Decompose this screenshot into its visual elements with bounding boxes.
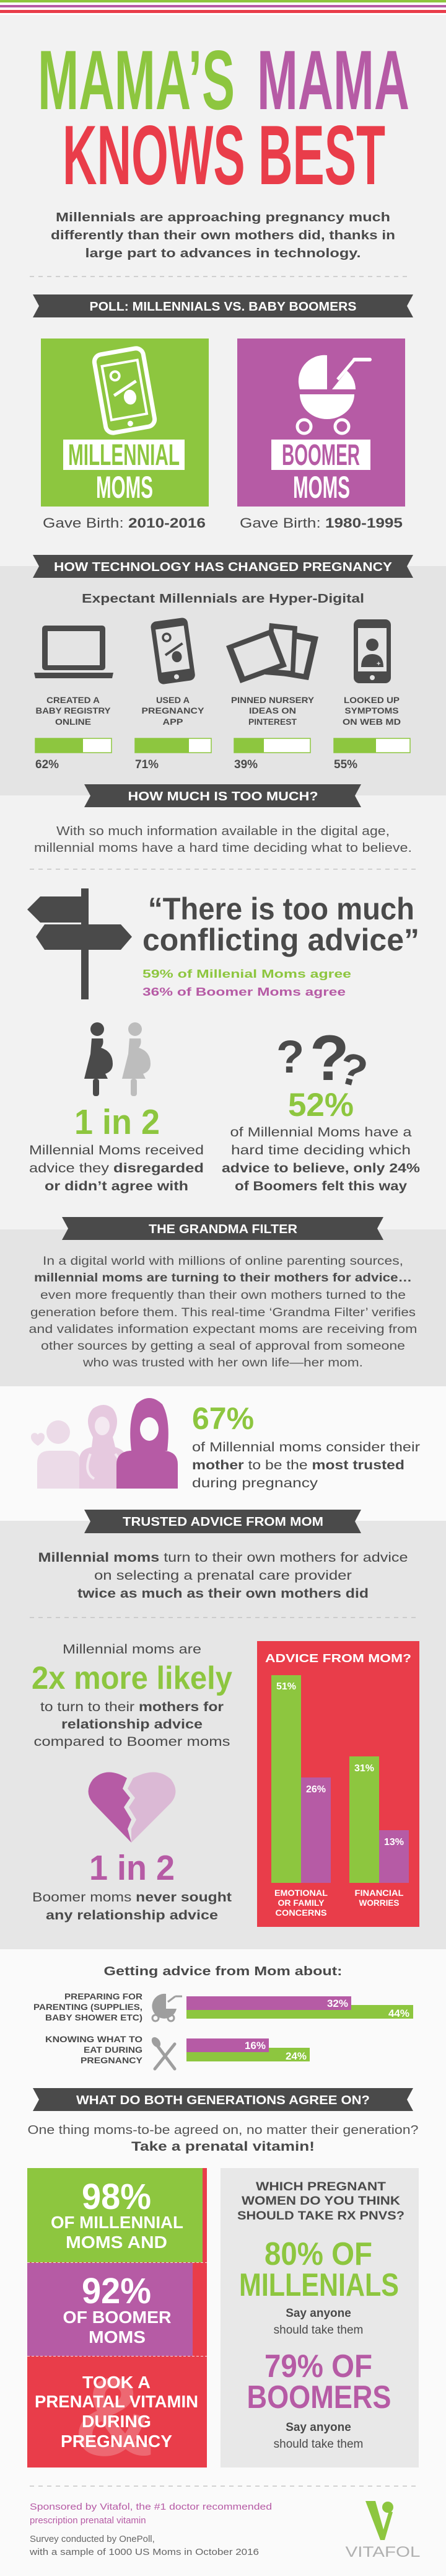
label: millennial xyxy=(63,440,185,470)
chart: advice topics: 32% xyxy=(327,1998,348,2009)
text: grandma filter paragraph: even more frequently than their own mothers turned to the xyxy=(40,1289,406,1302)
icon: phone with pacifier xyxy=(93,347,156,434)
text: grandma filter paragraph: who was trusted with her own life—her mom. xyxy=(82,1357,363,1370)
quote: too much conflicting advice: 59% of Millenial Moms agree xyxy=(142,968,351,980)
stat: 2x more likely: Millennial moms are xyxy=(63,1642,201,1657)
icon: signpost xyxy=(27,888,132,999)
footer: sponsor and survey: prescription prenatal vitamin xyxy=(30,2515,146,2526)
text: prenatal provider: on selecting a prenatal care provider xyxy=(94,1569,352,1583)
chart: advice topics: EAT DURING xyxy=(84,2045,142,2055)
heading: hyper-digital: Expectant Millennials are Hyper-Digital xyxy=(82,592,364,606)
text: digital age intro: With so much information available in the digital age, xyxy=(56,825,390,838)
icon: question marks xyxy=(276,1022,372,1098)
stat: 1 in 2 disregarded: or didn’t agree with xyxy=(45,1179,188,1193)
panel: rx pnvs: WHICH PREGNANT xyxy=(256,2180,386,2193)
stat: 1 in 2 disregarded: 1 in 2 xyxy=(74,1102,160,1142)
banner: how much is too much xyxy=(84,784,361,807)
text: prenatal vitamin: One thing moms-to-be agreed on, no matter their generation? xyxy=(27,2123,419,2137)
text: digital age intro xyxy=(34,825,412,855)
icon: broken heart xyxy=(88,1772,176,1843)
banner: trusted advice xyxy=(84,1510,361,1533)
text: prenatal provider: twice as much as their own mothers did xyxy=(77,1587,369,1601)
text: gave birth dates xyxy=(43,515,403,531)
icon: laptop xyxy=(34,626,113,678)
footer: sponsor and survey: Sponsored by Vitafol, the #1 doctor recommended xyxy=(30,2502,272,2512)
text: grandma filter paragraph: In a digital world with millions of online parenting sources, xyxy=(43,1255,403,1268)
stats: tech usage bars: 71% xyxy=(135,758,159,771)
banner: grandma filter xyxy=(62,1217,383,1240)
chart: advice from mom: 26% xyxy=(306,1784,326,1795)
stats: tech usage bars: IDEAS ON xyxy=(249,706,296,715)
stat: 67% trust mother xyxy=(192,1401,420,1490)
icon: question marks: ? xyxy=(310,1022,349,1094)
icon: pregnant women xyxy=(84,1022,151,1096)
stat: 67% trust mother: mother to be the most trusted xyxy=(192,1458,404,1472)
panel: vitamin stats: 98% xyxy=(82,2177,151,2217)
footer: sponsor and survey: Survey conducted by OnePoll, xyxy=(30,2534,155,2544)
panel: vitamin stats xyxy=(27,2168,207,2479)
icon: small stroller xyxy=(152,1994,182,2021)
stat: 67% trust mother: during pregnancy xyxy=(192,1476,318,1490)
chart: advice topics: PREGNANCY xyxy=(81,2055,143,2065)
icon: webmd phone xyxy=(354,619,391,683)
panel: boomer moms: MOMS xyxy=(293,470,350,505)
quote: too much conflicting advice xyxy=(142,892,419,998)
stat: 52% hard time deciding: 52% xyxy=(288,1087,354,1123)
text: grandma filter paragraph: generation before them. This real-time ‘Grandma Filter’ verifies xyxy=(30,1306,416,1319)
stats: tech usage bars: LOOKED UP xyxy=(344,695,400,705)
chart: advice from mom: EMOTIONAL xyxy=(274,1888,328,1898)
panel: vitamin stats: DURING xyxy=(82,2412,151,2431)
stats: tech usage bars xyxy=(35,695,410,771)
text: grandma filter paragraph: millennial moms are turning to their mothers for advice… xyxy=(34,1272,412,1285)
title xyxy=(38,33,409,202)
stat: 52% hard time deciding: advice to believe, only 24% xyxy=(222,1161,420,1175)
chart: advice topics: KNOWING WHAT TO xyxy=(45,2034,142,2044)
chart: advice topics: 16% xyxy=(245,2040,266,2052)
stat: 1 in 2 boomer never sought: any relationship advice xyxy=(46,1908,218,1923)
banner: grandma filter: THE GRANDMA FILTER xyxy=(149,1223,298,1236)
panel: rx pnvs: 80% OF xyxy=(265,2236,372,2272)
stat: 52% hard time deciding: of Boomers felt this way xyxy=(235,1179,407,1193)
chart: advice from mom: CONCERNS xyxy=(275,1908,327,1918)
stats: tech usage bars: APP xyxy=(162,717,183,727)
panel: millennial moms xyxy=(41,339,209,507)
panel: vitamin stats: OF MILLENNIAL xyxy=(51,2213,183,2232)
text: prenatal vitamin xyxy=(27,2123,419,2154)
stat: 1 in 2 boomer never sought: Boomer moms never sought xyxy=(32,1890,232,1905)
banner: what do both generations agree on xyxy=(33,2088,413,2111)
stats: tech usage bars: BABY REGISTRY xyxy=(36,706,111,715)
chart: advice topics: 44% xyxy=(388,2007,409,2019)
stat: 1 in 2 boomer never sought xyxy=(32,1848,232,1923)
stat: 2x more likely: compared to Boomer moms xyxy=(33,1735,230,1749)
text: gave birth dates: Gave Birth: 2010-2016 xyxy=(43,515,206,531)
quote: too much conflicting advice: conflicting advice” xyxy=(142,923,419,957)
text: grandma filter paragraph: and validates information expectant moms are receiving from xyxy=(28,1323,418,1336)
chart: advice from mom: WORRIES xyxy=(359,1898,399,1908)
chart: advice from mom: 13% xyxy=(384,1837,404,1848)
text: grandma filter paragraph xyxy=(28,1255,418,1370)
chart: advice topics: BABY SHOWER ETC) xyxy=(45,2012,142,2022)
banner: poll: POLL: MILLENNIALS VS. BABY BOOMERS xyxy=(89,300,357,314)
icon: question marks: ? xyxy=(276,1031,304,1082)
chart: advice topics: 24% xyxy=(286,2050,307,2062)
stat: 1 in 2 disregarded xyxy=(29,1102,204,1193)
logo: vitafol: VITAFOL xyxy=(346,2544,420,2561)
icon: stroller xyxy=(297,355,370,433)
panel: vitamin stats: & xyxy=(74,2355,154,2479)
panel: boomer moms: BOOMER xyxy=(282,439,360,472)
stat: 52% hard time deciding: hard time deciding which xyxy=(231,1143,411,1157)
intro text: differently than their own mothers did, thanks in xyxy=(51,229,395,242)
panel: rx pnvs xyxy=(221,2168,419,2468)
stats: tech usage bars: ON WEB MD xyxy=(343,717,401,727)
chart: advice from mom: FINANCIAL xyxy=(354,1888,404,1898)
chart: advice from mom: 51% xyxy=(276,1681,296,1692)
panel: rx pnvs: should take them xyxy=(274,2438,363,2451)
stats: tech usage bars: 62% xyxy=(35,758,59,771)
panel: vitamin stats: MOMS AND xyxy=(66,2233,167,2252)
panel: boomer moms xyxy=(237,339,405,507)
title: MAMA’S xyxy=(38,33,235,127)
stats: tech usage bars: 55% xyxy=(334,758,357,771)
text: gave birth dates: Gave Birth: 1980-1995 xyxy=(240,515,403,531)
stats: tech usage bars: PINNED NURSERY xyxy=(231,695,315,705)
stats: tech usage bars: 39% xyxy=(234,758,258,771)
panel: rx pnvs: 79% OF xyxy=(265,2348,372,2384)
text: prenatal provider xyxy=(38,1551,408,1601)
stat: 2x more likely: relationship advice xyxy=(61,1717,203,1732)
chart: advice from mom xyxy=(257,1641,419,1927)
stats: tech usage bars: PINTEREST xyxy=(248,717,297,727)
intro text: large part to advances in technology. xyxy=(85,247,361,260)
chart: advice topics xyxy=(33,1991,413,2069)
quote: too much conflicting advice: “There is too much xyxy=(148,892,414,926)
stat: 1 in 2 boomer never sought: 1 in 2 xyxy=(89,1848,175,1888)
icon: spoon and fork xyxy=(150,2035,175,2069)
banner: how much is too much: HOW MUCH IS TOO MUCH? xyxy=(128,790,318,803)
banner: what do both generations agree on: WHAT DO BOTH GENERATIONS AGREE ON? xyxy=(76,2094,370,2107)
stats: tech usage bars: SYMPTOMS xyxy=(344,706,399,715)
banner: how technology xyxy=(33,555,413,578)
intro text: Millennials are approaching pregnancy much xyxy=(56,211,390,224)
stat: 1 in 2 disregarded: Millennial Moms received xyxy=(29,1143,204,1157)
stats: tech usage bars: CREATED A xyxy=(46,695,100,705)
panel: rx pnvs: should take them xyxy=(274,2324,363,2337)
label: boomer xyxy=(271,440,370,470)
panel: rx pnvs: MILLENIALS xyxy=(239,2267,399,2303)
stat: 2x more likely: 2x more likely xyxy=(32,1660,232,1696)
stat: 52% hard time deciding xyxy=(222,1087,420,1193)
chart: advice topics: PARENTING (SUPPLIES, xyxy=(33,2002,142,2012)
stat: 2x more likely: to turn to their mothers for xyxy=(40,1700,224,1714)
panel: millennial moms: MILLENNIAL xyxy=(68,439,180,472)
panel: rx pnvs: BOOMERS xyxy=(247,2379,391,2415)
chart: advice from mom: 31% xyxy=(354,1763,374,1774)
text: grandma filter paragraph: other sources by getting a seal of approval from someone xyxy=(41,1340,405,1353)
panel: vitamin stats: PREGNANCY xyxy=(61,2432,172,2451)
panel: vitamin stats: 92% xyxy=(82,2271,151,2311)
panel: rx pnvs: Say anyone xyxy=(286,2421,351,2434)
icon: question marks: ? xyxy=(333,1043,372,1098)
icon: trusted figures xyxy=(31,1398,178,1489)
footer: sponsor and survey xyxy=(29,2502,272,2557)
chart: advice from mom: OR FAMILY xyxy=(278,1898,325,1908)
panel: vitamin stats: PRENATAL VITAMIN xyxy=(35,2392,198,2411)
banner: how technology: HOW TECHNOLOGY HAS CHANGED PREGNANCY xyxy=(54,560,393,574)
text: digital age intro: millennial moms have a hard time deciding what to believe. xyxy=(34,841,412,855)
stats: tech usage bars: USED A xyxy=(156,695,190,705)
panel: rx pnvs: SHOULD TAKE RX PNVS? xyxy=(237,2210,404,2223)
text: prenatal provider: Millennial moms turn to their own mothers for advice xyxy=(38,1551,408,1565)
chart: advice topics: PREPARING FOR xyxy=(64,1991,142,2001)
panel: vitamin stats: TOOK A xyxy=(82,2373,151,2392)
text: prenatal vitamin: Take a prenatal vitamin! xyxy=(131,2140,315,2154)
stat: 67% trust mother: of Millennial moms consider their xyxy=(192,1440,420,1454)
stat: 52% hard time deciding: of Millennial Moms have a xyxy=(230,1125,412,1140)
heading: getting advice from mom: Getting advice from Mom about: xyxy=(104,1965,342,1978)
stat: 1 in 2 disregarded: advice they disregarded xyxy=(29,1161,204,1175)
intro text xyxy=(51,211,395,260)
icon: pregnancy app phone xyxy=(150,617,196,685)
logo: vitafol xyxy=(346,2501,420,2561)
panel: vitamin stats: OF BOOMER xyxy=(63,2308,171,2327)
banner: poll xyxy=(33,294,413,317)
banner: trusted advice: TRUSTED ADVICE FROM MOM xyxy=(123,1515,323,1529)
stats: tech usage bars: ONLINE xyxy=(55,717,91,727)
icon: webmd phone: + xyxy=(377,660,380,668)
icon: photos xyxy=(226,623,318,683)
chart: advice from mom: ADVICE FROM MOM? xyxy=(265,1652,411,1665)
footer: sponsor and survey: with a sample of 1000 US Moms in October 2016 xyxy=(29,2547,259,2557)
panel: rx pnvs: WOMEN DO YOU THINK xyxy=(242,2195,400,2208)
panel: millennial moms: MOMS xyxy=(96,470,153,505)
panel: vitamin stats: MOMS xyxy=(89,2327,146,2347)
stat: 67% trust mother: 67% xyxy=(192,1401,254,1436)
stats: tech usage bars: PREGNANCY xyxy=(141,706,204,715)
stat: 2x more likely xyxy=(32,1642,232,1749)
quote: too much conflicting advice: 36% of Boomer Moms agree xyxy=(142,986,346,998)
panel: rx pnvs: Say anyone xyxy=(286,2307,351,2320)
